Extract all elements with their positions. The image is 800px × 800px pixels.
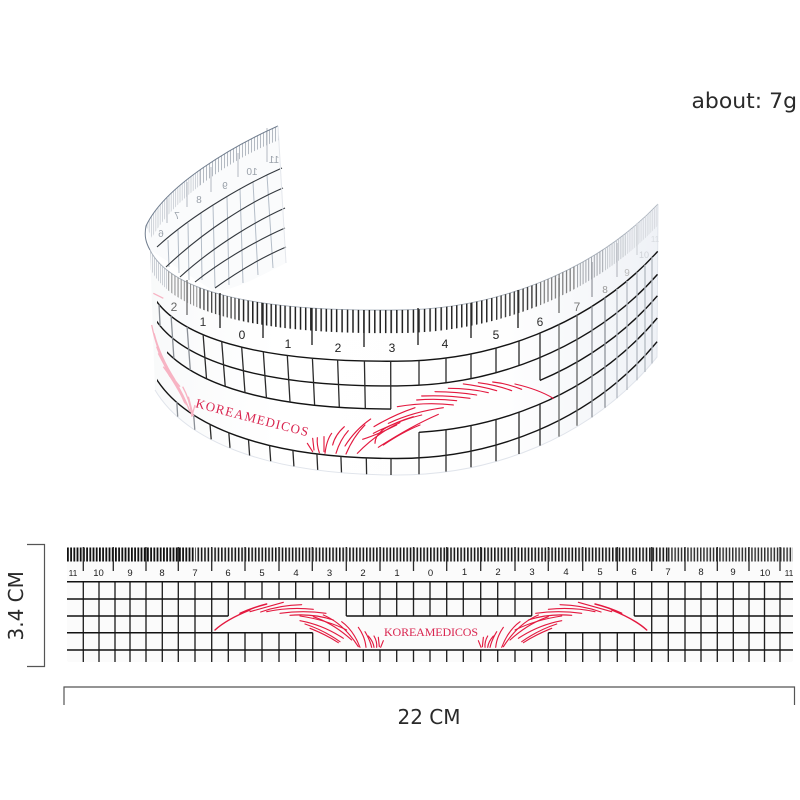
height dimension bracket bbox=[27, 544, 44, 666]
flat numbers: 6 bbox=[631, 567, 637, 578]
flat numbers: 3 bbox=[529, 567, 535, 578]
flat numbers: 9 bbox=[127, 568, 133, 579]
flat numbers: 10 bbox=[93, 568, 104, 579]
flat numbers: 0 bbox=[428, 568, 433, 579]
flat numbers: 5 bbox=[259, 568, 265, 579]
front numbers: 2 bbox=[171, 300, 178, 314]
flat numbers bbox=[69, 567, 794, 579]
flat numbers: 2 bbox=[495, 567, 501, 578]
curved ruler photo bbox=[144, 126, 660, 476]
flat numbers: 8 bbox=[159, 568, 165, 579]
back grid lines bbox=[157, 168, 286, 288]
flat right eyebrow bbox=[478, 602, 647, 647]
back mirrored numbers: 6 bbox=[158, 229, 164, 240]
flat numbers: 11 bbox=[785, 568, 794, 578]
flat numbers: 10 bbox=[760, 568, 770, 579]
flat numbers: 1 bbox=[462, 567, 467, 578]
front numbers: 1 bbox=[200, 315, 207, 329]
front numbers: 11 bbox=[651, 235, 660, 244]
back outer edge bbox=[145, 126, 278, 250]
front numbers: 0 bbox=[239, 328, 246, 342]
height label: 3.4 CM bbox=[4, 571, 28, 640]
back mirrored numbers bbox=[158, 155, 279, 240]
flat numbers: 7 bbox=[665, 567, 671, 578]
back tick marks bbox=[146, 128, 278, 238]
front grid lines bbox=[152, 251, 658, 459]
front numbers: 1 bbox=[285, 337, 292, 351]
flat tick marks bbox=[67, 548, 793, 562]
flat numbers: 6 bbox=[225, 568, 231, 579]
width label: 22 CM bbox=[398, 705, 461, 729]
curved brand text: KOREAMEDICOS bbox=[195, 398, 308, 436]
back section of curved ruler bbox=[144, 126, 286, 288]
flat numbers: 4 bbox=[563, 567, 569, 578]
front numbers: 5 bbox=[493, 328, 500, 342]
back mirrored numbers: 9 bbox=[222, 181, 228, 192]
flat numbers: 9 bbox=[730, 567, 736, 578]
flat numbers: 5 bbox=[597, 567, 603, 578]
front numbers: 2 bbox=[335, 341, 342, 355]
flat numbers: 7 bbox=[192, 568, 198, 579]
front numbers: 6 bbox=[537, 315, 544, 329]
flat numbers: 4 bbox=[293, 568, 299, 579]
front numbers: 3 bbox=[389, 341, 396, 355]
flat numbers: 11 bbox=[69, 568, 78, 578]
flat brand text: KOREAMEDICOS bbox=[384, 625, 478, 639]
flat ruler bbox=[67, 547, 794, 662]
flat long ticks bbox=[83, 547, 780, 571]
flat left eyebrow bbox=[215, 602, 383, 647]
back mirrored numbers: 8 bbox=[196, 195, 202, 206]
front numbers: 10 bbox=[639, 250, 649, 260]
front numbers bbox=[171, 235, 660, 355]
front tick marks bbox=[150, 204, 658, 334]
weight label: about: 7g bbox=[692, 89, 797, 113]
flat numbers: 3 bbox=[327, 568, 332, 579]
back mirrored numbers: 10 bbox=[246, 167, 258, 178]
curved right eyebrow bbox=[307, 382, 553, 454]
front numbers: 9 bbox=[624, 268, 630, 279]
back mirrored numbers: 7 bbox=[174, 211, 180, 222]
flat numbers: 8 bbox=[698, 567, 704, 578]
front numbers: 8 bbox=[602, 285, 608, 296]
front section of curved ruler bbox=[150, 204, 660, 476]
flat numbers: 1 bbox=[394, 568, 400, 579]
back mirrored numbers: 11 bbox=[268, 155, 279, 166]
back long ticks bbox=[167, 128, 267, 223]
front long ticks bbox=[187, 223, 637, 347]
width dimension bracket bbox=[64, 687, 794, 705]
front numbers: 7 bbox=[574, 300, 581, 314]
flat numbers: 2 bbox=[360, 568, 366, 579]
curved left eyebrow, faded bbox=[152, 293, 195, 417]
flat grid bbox=[67, 582, 793, 662]
front numbers: 4 bbox=[442, 337, 449, 351]
